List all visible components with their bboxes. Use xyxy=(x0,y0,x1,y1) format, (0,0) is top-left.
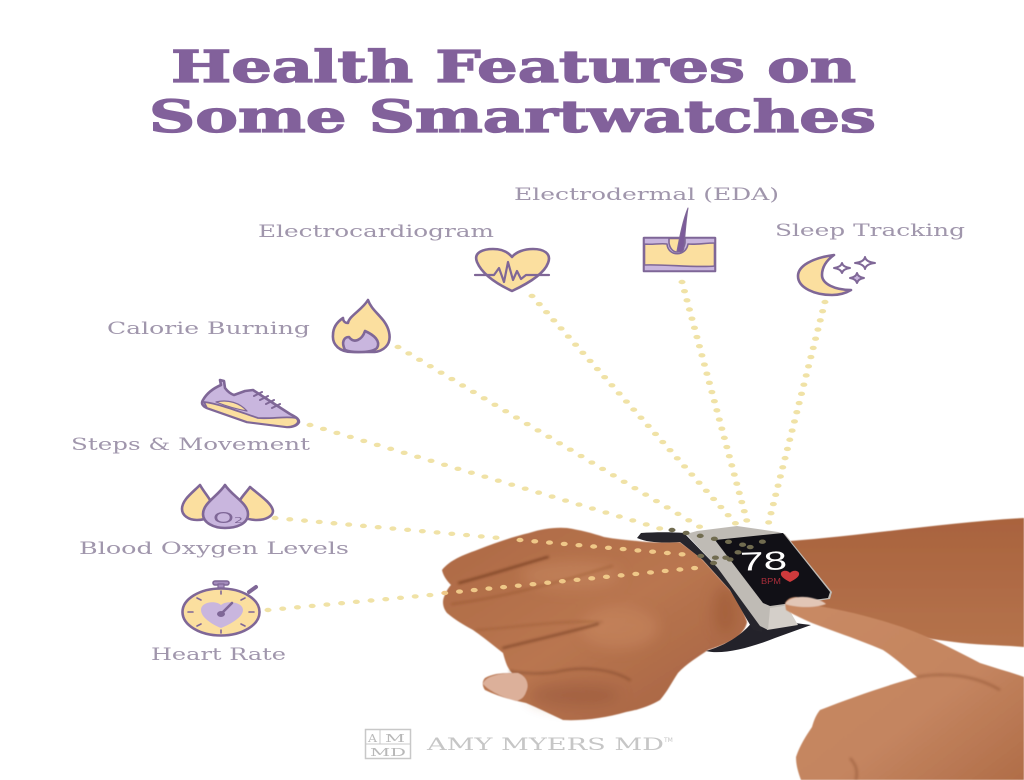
fingernail xyxy=(785,597,826,607)
icon: crescent moon and stars xyxy=(798,255,875,295)
dotted connectors fading across the watch xyxy=(672,530,764,563)
clenched hand xyxy=(442,528,747,720)
thumb nail xyxy=(483,673,528,701)
watch xyxy=(637,526,832,652)
heart reading: BPM xyxy=(761,577,781,586)
title xyxy=(149,42,876,143)
label: Electrodermal (EDA): Electrodermal (EDA) xyxy=(514,185,779,205)
pointing hand xyxy=(785,597,1024,780)
lower band xyxy=(706,620,811,652)
heart reading xyxy=(761,571,799,586)
logo mark xyxy=(365,729,410,759)
reading 78: 78 xyxy=(740,545,788,577)
silver frame xyxy=(686,526,832,630)
forearm xyxy=(790,518,1024,647)
lower silver lug xyxy=(766,606,798,630)
icon: skin layer with hair follicle xyxy=(644,208,715,271)
dotted connector lines on white xyxy=(268,518,510,610)
label: Sleep Tracking: Sleep Tracking xyxy=(775,221,965,241)
logo mark: MD xyxy=(370,746,406,759)
logo mark: A xyxy=(367,732,378,745)
trademark: TM xyxy=(663,737,673,744)
label: Calorie Burning: Calorie Burning xyxy=(107,319,310,339)
dotted connector lines over the hand xyxy=(445,540,705,593)
icon: stopwatch with heart xyxy=(182,581,260,636)
icon: heart with ECG trace xyxy=(475,249,549,291)
icon: flame xyxy=(333,300,390,352)
upper band xyxy=(637,532,762,632)
finger creases xyxy=(452,557,630,680)
knuckle shading xyxy=(850,675,1000,780)
icon: blood oxygen drops: O 2 xyxy=(213,509,243,527)
title: Health Features on xyxy=(171,42,856,93)
label: Blood Oxygen Levels: Blood Oxygen Levels xyxy=(79,539,349,559)
hand highlights xyxy=(520,561,737,707)
icon: blood oxygen drops xyxy=(182,485,273,528)
logo wordmark: AMY MYERS MD xyxy=(425,735,664,754)
dotted connector lines before the hand xyxy=(310,282,825,530)
screen xyxy=(715,533,830,606)
label: Heart Rate: Heart Rate xyxy=(151,645,286,665)
title: Some Smartwatches xyxy=(149,92,876,143)
icon: running shoe xyxy=(202,380,299,427)
logo mark: M xyxy=(385,732,405,745)
logo xyxy=(365,729,673,759)
label: Electrocardiogram: Electrocardiogram xyxy=(258,222,494,242)
label: Steps & Movement: Steps & Movement xyxy=(71,435,310,455)
